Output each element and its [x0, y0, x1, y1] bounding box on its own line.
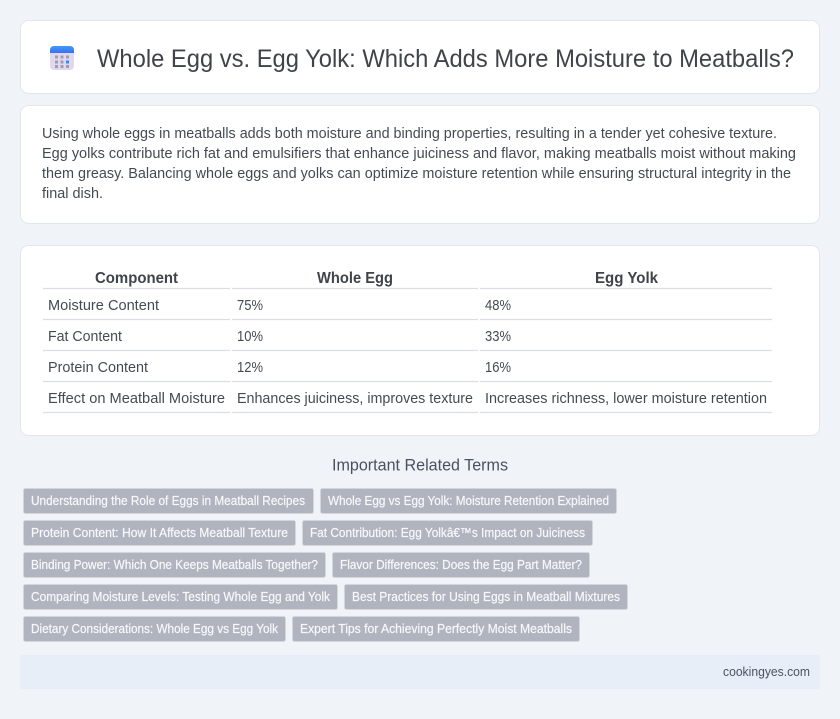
table row: moisture content	[48, 298, 511, 314]
text block: introduction: them greasy. Balancing whole eggs and yolks can optimize moisture retention while ensuring structural integrity in the	[42, 166, 791, 182]
tag	[24, 520, 296, 546]
icon: calendar	[50, 46, 74, 70]
table row: effect on meatball moisture: Increases richness, lower moisture retention	[485, 391, 767, 407]
footer	[20, 655, 820, 689]
tag	[302, 520, 592, 546]
heading: important related terms: Important Related Terms	[332, 456, 508, 474]
tag: Comparing Moisture Levels: Testing Whole Egg and Yolk	[31, 590, 331, 604]
table row: fat content: Fat Content	[48, 329, 122, 345]
tag: Binding Power: Which One Keeps Meatballs Together?	[31, 558, 318, 572]
table header: Whole Egg	[317, 270, 393, 287]
tag: Understanding the Role of Eggs in Meatball Recipes	[31, 494, 305, 508]
table row: fat content: 10%	[237, 329, 263, 345]
tag: Whole Egg vs Egg Yolk: Moisture Retention Explained	[328, 494, 609, 508]
table row: protein content: 12%	[237, 360, 263, 376]
tag: Best Practices for Using Eggs in Meatball Mixtures	[352, 590, 620, 604]
table row: protein content: 16%	[485, 360, 511, 376]
text block: introduction: Using whole eggs in meatballs adds both moisture and binding properties, resulting in a tender yet cohesive texture.	[42, 126, 777, 142]
tag: Protein Content: How It Affects Meatball Texture	[31, 526, 288, 540]
tag	[320, 488, 616, 514]
panel: related term tags	[24, 488, 628, 642]
tag: Fat Contribution: Egg Yolkâ€™s Impact on Juiciness	[310, 526, 585, 540]
tag	[24, 488, 314, 514]
tag: Dietary Considerations: Whole Egg vs Egg Yolk	[31, 622, 279, 636]
tag	[332, 552, 590, 578]
text block: introduction: final dish.	[42, 186, 103, 202]
tag	[24, 616, 286, 642]
table row: moisture content: Moisture Content	[48, 298, 159, 314]
tag	[344, 584, 628, 610]
panel: introduction	[20, 106, 820, 224]
table row: moisture content: 75%	[237, 298, 263, 314]
table header: Egg Yolk	[595, 270, 658, 287]
table row: effect on meatball moisture: Enhances juiciness, improves texture	[237, 391, 473, 407]
table row: fat content: 33%	[485, 329, 511, 345]
footer source text: cookingyes.com	[723, 664, 810, 679]
tag	[24, 584, 338, 610]
text block: introduction	[42, 126, 796, 202]
tag: Expert Tips for Achieving Perfectly Moist Meatballs	[300, 622, 572, 636]
panel: comparison table	[20, 246, 820, 436]
table row: protein content	[48, 360, 511, 376]
tag	[24, 552, 326, 578]
tag: Flavor Differences: Does the Egg Part Matter?	[340, 558, 582, 572]
tag	[292, 616, 580, 642]
panel: header	[20, 20, 820, 94]
table row: moisture content: 48%	[485, 298, 511, 314]
text block: introduction: Egg yolks contribute rich fat and emulsifiers that enhance juiciness and flavor, making meatballs moist without making	[42, 146, 796, 162]
table row: effect on meatball moisture	[48, 391, 767, 407]
table row: protein content: Protein Content	[48, 360, 148, 376]
table header	[95, 270, 658, 287]
table header: Component	[95, 270, 179, 287]
title: Whole Egg vs. Egg Yolk: Which Adds More Moisture to Meatballs?	[97, 45, 794, 73]
table row: effect on meatball moisture: Effect on Meatball Moisture	[48, 391, 225, 407]
table row: fat content	[48, 329, 511, 345]
